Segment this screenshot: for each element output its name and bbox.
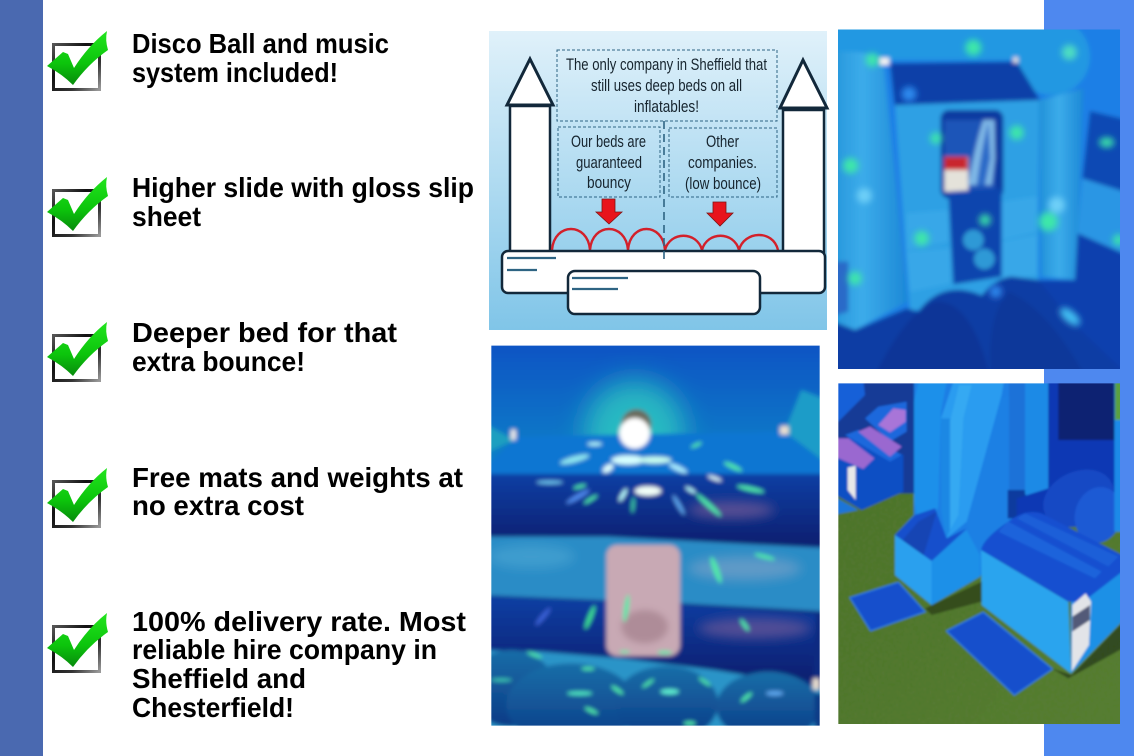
feature: disco ball: Disco Ball and music bbox=[132, 28, 389, 59]
glow bbox=[585, 380, 685, 480]
slide tower bbox=[895, 365, 1048, 605]
callout: only company: The only company in Sheffield that bbox=[566, 56, 767, 74]
left sidebar bbox=[0, 0, 43, 756]
photo: slide and mats on grass bbox=[838, 383, 1120, 724]
ceiling panel bbox=[478, 432, 831, 478]
right tower bbox=[780, 60, 827, 253]
castle front step bbox=[568, 271, 760, 314]
mat: left bbox=[850, 582, 925, 631]
block label bbox=[1072, 593, 1091, 672]
centre wall bbox=[895, 100, 1039, 312]
base detail lines bbox=[507, 258, 628, 289]
lawn bbox=[838, 492, 1120, 724]
feature: free mats: no extra cost bbox=[132, 490, 304, 521]
callout: other companies: Other bbox=[706, 133, 739, 151]
disco ball bbox=[619, 409, 651, 449]
feature: delivery rate: reliable hire company in bbox=[132, 634, 437, 665]
centre divider bbox=[663, 121, 665, 263]
callout: other companies: (low bounce) bbox=[685, 175, 761, 193]
floor bed bbox=[491, 646, 820, 726]
front block bbox=[981, 512, 1134, 673]
panel: deep bed diagram bbox=[489, 31, 827, 330]
feature: disco ball: system included! bbox=[132, 57, 338, 88]
dark band bbox=[478, 474, 831, 546]
feature: delivery rate bbox=[47, 606, 466, 723]
callout: other companies bbox=[669, 128, 777, 197]
bounce arcs: low beds bbox=[665, 235, 778, 250]
navy strip with patches bbox=[948, 188, 1002, 284]
left pillar bbox=[838, 51, 907, 332]
photo: disco ball interior bbox=[491, 346, 820, 726]
callout: our beds: bouncy bbox=[587, 174, 632, 192]
pink patch bbox=[606, 545, 680, 656]
icon: green tick in box bbox=[47, 322, 108, 380]
ceiling anchors bbox=[511, 429, 516, 440]
callout: only company: inflatables! bbox=[634, 98, 699, 116]
navy header panel bbox=[890, 62, 1040, 108]
photo: inside castle with doorway bbox=[838, 30, 1120, 369]
shadows bbox=[925, 582, 982, 615]
rear bed and dark interior bbox=[1016, 383, 1116, 516]
callout: our beds bbox=[558, 127, 660, 197]
feature: disco ball bbox=[47, 28, 389, 90]
window bbox=[941, 110, 1003, 198]
feature: higher slide: Higher slide with gloss slip bbox=[132, 172, 474, 203]
lower dark band bbox=[478, 596, 816, 680]
feature: deeper bed: extra bounce! bbox=[132, 346, 305, 377]
icon: green tick in box bbox=[47, 613, 108, 672]
icon: green tick in box bbox=[47, 177, 108, 236]
callout: other companies: companies. bbox=[688, 154, 757, 172]
bounce arcs: deep beds bbox=[552, 229, 665, 250]
icon: green tick in box bbox=[47, 468, 108, 526]
left tower bbox=[507, 59, 553, 252]
right pillar bbox=[1039, 88, 1083, 280]
feature: deeper bed: Deeper bed for that bbox=[132, 317, 397, 348]
feature: free mats: Free mats and weights at bbox=[132, 462, 463, 493]
neighbouring inflatable bbox=[838, 383, 916, 516]
arrow: left red bbox=[596, 199, 622, 224]
feature: delivery rate: Sheffield and bbox=[132, 663, 306, 694]
right sidebar bbox=[1044, 0, 1134, 756]
light streaks bbox=[491, 441, 783, 725]
feature: free mats bbox=[47, 462, 463, 526]
callout: our beds: Our beds are bbox=[571, 133, 646, 151]
mat: right bbox=[947, 612, 1052, 695]
feature: delivery rate: 100% delivery rate. Most bbox=[132, 606, 466, 637]
castle base bbox=[502, 251, 825, 293]
floor bbox=[838, 274, 1118, 369]
icon: green tick in box bbox=[47, 31, 108, 90]
callout: our beds: guaranteed bbox=[576, 154, 642, 172]
feature: delivery rate: Chesterfield! bbox=[132, 692, 294, 723]
feature: deeper bed bbox=[47, 317, 397, 380]
disco light spots bbox=[843, 40, 1124, 328]
callout: only company bbox=[557, 50, 777, 121]
right side wall bbox=[1081, 110, 1120, 192]
feature: higher slide: sheet bbox=[132, 201, 201, 232]
callout: only company: still uses deep beds on all bbox=[591, 77, 742, 95]
arrow: right red bbox=[707, 202, 733, 226]
feature: higher slide bbox=[47, 172, 474, 236]
feature list bbox=[47, 28, 474, 723]
light band bbox=[478, 537, 831, 612]
seam tabs bbox=[880, 58, 889, 65]
